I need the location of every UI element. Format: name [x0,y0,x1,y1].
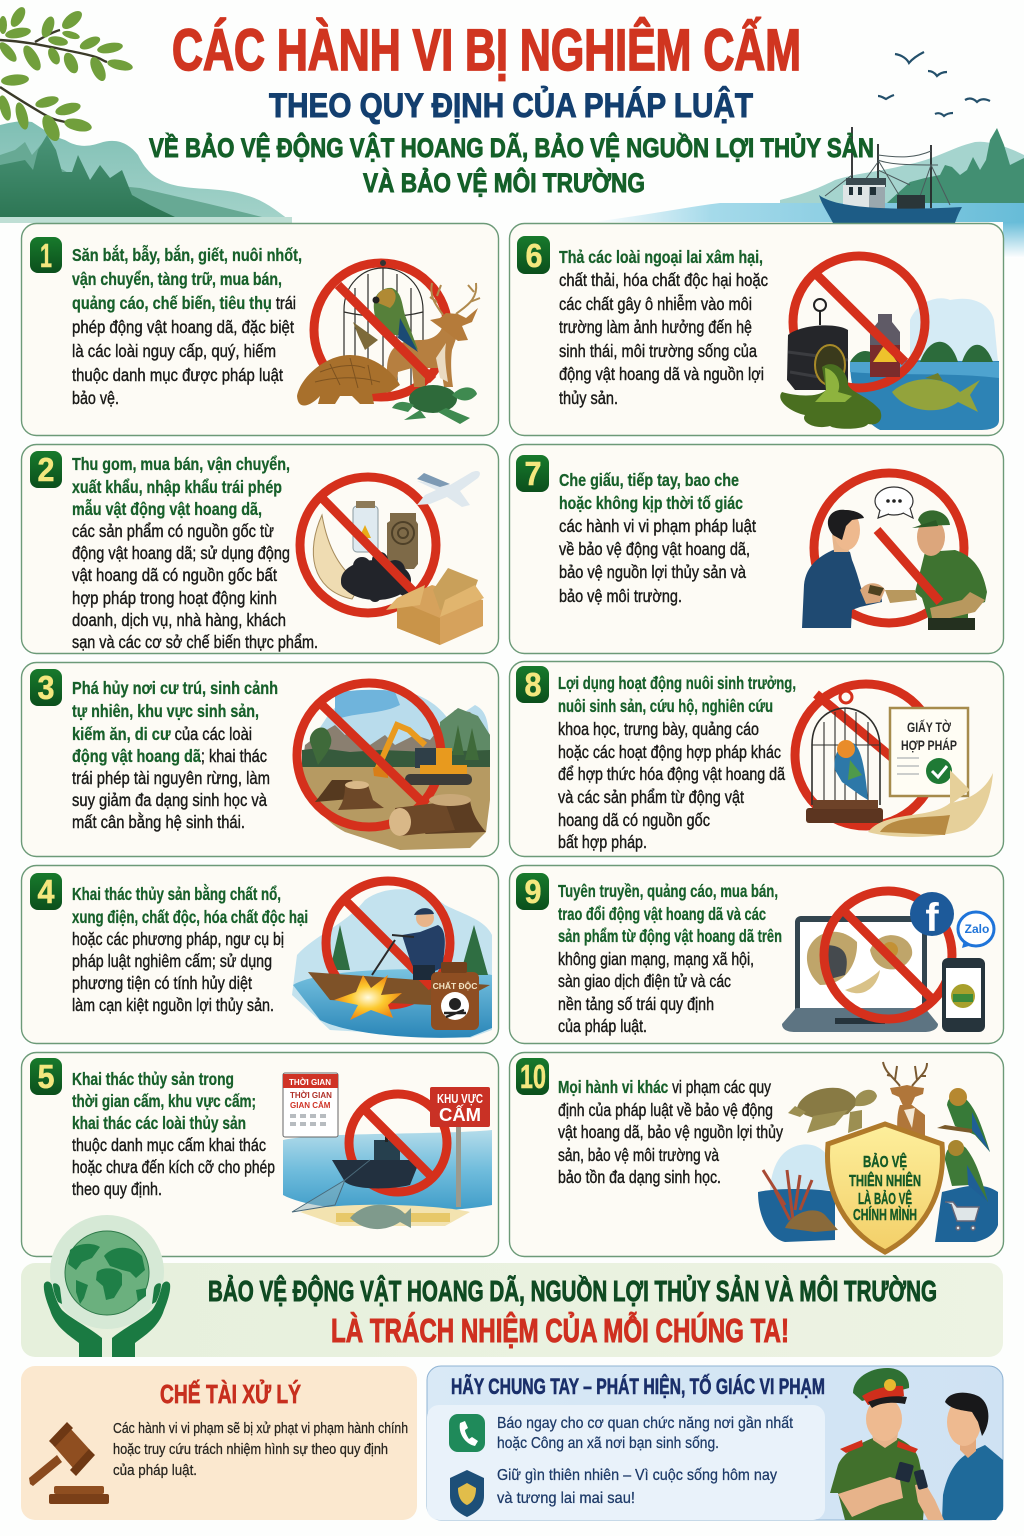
text 3: tự nhiên, khu vực sinh sản, [72,701,259,721]
badge 10: 10 [520,1058,546,1095]
text 8: hoặc các hoạt động hợp pháp khác [558,742,781,762]
text 4: xung điện, chất độc, hóa chất độc hại [72,907,308,927]
text 10: sản, bảo vệ môi trường và [558,1145,719,1165]
badge 1: 1 [40,237,52,274]
text 5: hoặc chưa đến kích cỡ cho phép [72,1157,275,1177]
panel: item 9 [510,866,1004,1044]
text 8: nuôi sinh sản, cứu hộ, nghiên cứu [558,696,773,716]
text 4: pháp luật nghiêm cấm; sử dụng [72,951,272,971]
text 6: sinh thái, môi trường sống của [559,341,757,361]
icon: facebook [910,892,954,940]
text 9: Tuyên truyền, quảng cáo, mua bán, [558,881,778,901]
text 3: Phá hủy nơi cư trú, sinh cảnh [72,678,278,698]
icon: shield: LÀ BẢO VỆ [858,1189,912,1208]
text 1: thuộc danh mục được pháp luật [72,365,283,385]
badge 3: 3 [38,669,54,706]
text 5: thuộc danh mục cấm khai thác [72,1135,266,1155]
badge 2: 2 [38,451,54,488]
text 9: nền tảng số trái quy định [558,994,714,1014]
badge 8: 8 [524,666,542,703]
text 8: và các sản phẩm từ động vật [558,787,744,807]
text: report line: Báo ngay cho cơ quan chức năng nơi gần nhất [497,1415,793,1432]
text 7: bảo vệ nguồn lợi thủy sản và [559,562,746,582]
text: keep nature line [497,1467,777,1507]
text 8: bất hợp pháp. [558,832,647,852]
text 6: thủy sản. [559,388,618,408]
text 4 [72,883,308,1015]
text 1: phép động vật hoang dã, đặc biệt [72,317,294,337]
text 7: các hành vi vi phạm pháp luật [559,516,756,536]
panel: report violations [427,1366,1003,1520]
icon: fishing boat [819,127,962,223]
icon: gavel [29,1422,109,1504]
header scenery: right hills and water [590,128,1024,258]
icon: shield [828,1124,942,1252]
text 3: kiếm ăn, di cư của các loài [72,724,252,744]
text 9 [558,881,782,1036]
text 6: các chất gây ô nhiễm vào môi [559,293,752,314]
text 1: bảo vệ. [72,388,119,408]
text 7 [559,470,756,606]
illustration: caged bird, legal paper, tusk [795,684,993,837]
text 1: Săn bắt, bẫy, bắn, giết, nuôi nhốt, [72,244,302,265]
text: penalties: hoặc truy cứu trách nhiệm hình sự theo quy định [113,1441,388,1458]
text 8 [558,673,796,852]
banner: call to action [21,1215,1003,1357]
panel: item 4 [22,866,498,1044]
panel: item 7 [510,444,1004,654]
text 6: trường làm ảnh hưởng đến hệ [559,317,752,337]
text: report line [497,1415,793,1452]
icon: police shield [450,1470,484,1517]
text 3: động vật hoang dã; khai thác [72,746,267,766]
illustration: explosive fishing scene [292,881,492,1038]
badge 9 [516,873,549,910]
text: penalties: Các hành vi vi phạm sẽ bị xử phạt vi phạm hành chính [113,1420,408,1437]
icon: shield: CHÍNH MÌNH [853,1205,917,1224]
text 2: Thu gom, mua bán, vận chuyển, [72,454,290,474]
turtle [409,385,457,413]
illustration: caged parrot, deer, pangolin, turtle [297,260,480,424]
text 5: theo quy định. [72,1179,162,1199]
subtitle: theo quy dinh: THEO QUY ĐỊNH CỦA PHÁP LUẬT [269,87,753,125]
badge 3 [30,669,62,706]
icon: zalo: Zalo [965,922,989,936]
illustration: police officer [830,1368,925,1520]
badge 4: 4 [38,873,55,910]
deer [387,325,458,387]
badge 5: 5 [38,1058,54,1095]
illustration: second phone and hand [914,1469,944,1520]
panel: item 8 [510,662,1004,856]
text 10: vật hoang dã, bảo vệ nguồn lợi thủy [558,1122,783,1142]
panel: item 6 [510,224,1004,436]
icon: legal document: GIẤY TỜ [907,718,951,735]
badge 7 [516,455,549,492]
text 1: quảng cáo, chế biến, tiêu thụ trái [72,293,296,313]
illustration: tusk, jar, charcoal pile, plane, box [300,471,484,645]
icon: zalo [958,912,994,948]
icon: hands holding globe [44,1215,170,1357]
badge 6: 6 [526,237,542,274]
text 4: Khai thác thủy sản bằng chất nổ, [72,883,281,904]
parrot [374,288,418,350]
icon: facebook: f [925,896,939,940]
text 2: hợp pháp trong hoạt động kinh [72,588,277,608]
text 6: chất thải, hóa chất độc hại hoặc [559,270,768,290]
man right [915,550,987,618]
heading: report: HÃY CHUNG TAY – PHÁT HIỆN, TỐ GIÁC VI PHẠM [451,1373,825,1399]
man left [802,548,882,628]
illustration: banned fishing area scene: THỜI GIAN [290,1091,332,1100]
text 5: khai thác các loài thủy sản [72,1113,246,1133]
illustration: banned fishing area scene: GIAN CẤM [290,1100,331,1110]
icon: phone [449,1414,485,1452]
text 10: bảo tồn đa dạng sinh học. [558,1167,721,1187]
text 5 [72,1069,275,1199]
illustration: explosive fishing scene: CHẤT ĐỘC [433,980,477,991]
text 8: Lợi dụng hoạt động nuôi sinh trưởng, [558,673,796,693]
icon: legal document: HỢP PHÁP [901,737,957,753]
badge 9: 9 [524,873,542,910]
illustration: laptop selling wildlife, social apps, phone [782,891,994,1032]
panel: item 3 [22,662,498,856]
illustration: banned fishing area scene: THỜI GIAN [289,1078,331,1087]
text 7: hoặc không kịp thời tố giác [559,493,743,513]
text 9: trao đổi động vật hoang dã và các [558,904,766,924]
text 2: mẫu vật động vật hoang dã, [72,498,262,519]
text 4: phương tiện có tính hủy diệt [72,973,252,993]
text 1: vận chuyển, tàng trữ, mua bán, [72,269,282,289]
text 2: các sản phẩm có nguồn gốc từ [72,521,274,541]
panel: penalties [21,1366,417,1520]
badge 4 [30,873,62,910]
text 9: của pháp luật. [558,1016,647,1036]
text 2 [72,454,318,652]
text 4: làm cạn kiệt nguồn lợi thủy sản. [72,995,274,1015]
badge 2 [30,451,62,488]
illustration: banned fishing area scene: KHU VỰC [437,1091,483,1106]
panel: item 1 [22,224,498,436]
illustration: polluted water, barrel, fish [780,256,999,430]
text 9: không gian mạng, mạng xã hội, [558,949,754,969]
text 3: mất cân bằng hệ sinh thái. [72,811,245,832]
text 6 [559,247,768,408]
illustration: citizen [942,1393,1003,1520]
text 10 [558,1077,783,1187]
text 3 [72,678,278,832]
text 8: hoang dã có nguồn gốc [558,810,710,830]
text 3: suy giảm đa dạng sinh học và [72,790,267,810]
panel: item 2 [22,444,498,654]
illustration: two men exchanging behind the law [802,473,987,630]
text 1 [72,244,302,408]
badge 6 [517,236,550,274]
text 6: động vật hoang dã và nguồn lợi [559,364,764,384]
text 1: là các loài nguy cấp, quý, hiếm [72,341,276,361]
pangolin [297,355,400,406]
panel: item 10 [510,1052,1004,1256]
icon: speech bubble [875,487,913,518]
text 4: hoặc các phương pháp, ngư cụ bị [72,929,284,949]
illustration: animals behind protection shield [758,1062,998,1252]
title: CÁC HÀNH VI BỊ NGHIÊM CẤM [172,18,801,83]
text: keep nature line: và tương lai mai sau! [497,1490,635,1507]
text: report line: hoặc Công an xã nơi bạn sinh sống. [497,1435,719,1452]
text 7: bảo vệ môi trường. [559,586,682,606]
text 5: Khai thác thủy sản trong [72,1069,234,1089]
text 10: Mọi hành vi khác vi phạm các quy [558,1077,771,1097]
text 10: định của pháp luật về bảo vệ động [558,1100,773,1120]
text 2: doanh, dịch vụ, nhà hàng, khách [72,610,286,630]
badge 5 [30,1058,62,1095]
text 9: sản phẩm từ động vật hoang dã trên [558,926,782,946]
text 8: để hợp thức hóa động vật hoang dã [558,764,785,784]
illustration: banned fishing area scene [283,1073,492,1229]
text 2: động vật hoang dã; sử dụng động [72,543,290,563]
text 2: xuất khẩu, nhập khẩu trái phép [72,477,282,497]
text 8: khoa học, trưng bày, quảng cáo [558,719,759,739]
badge 1 [30,237,62,274]
text: penalties: của pháp luật. [113,1462,197,1479]
badge 7: 7 [524,455,542,492]
text: keep nature line: Giữ gìn thiên nhiên – Vì cuộc sống hôm nay [497,1467,777,1484]
icon: shield: BẢO VỆ [863,1152,907,1171]
text: penalties [113,1420,408,1479]
banner heading line 2: LÀ TRÁCH NHIỆM CỦA MỖI CHÚNG TA! [331,1312,789,1349]
badge 8 [516,666,549,703]
icon: legal document [890,708,968,796]
text 9: sàn giao dịch điện tử và các [558,971,731,991]
text 3: trái phép tài nguyên rừng, làm [72,768,270,788]
icon: birds [878,52,990,116]
subtitle: scope line 1: VỀ BẢO VỆ ĐỘNG VẬT HOANG DÃ, BẢO VỆ NGUỒN LỢI THỦY SẢN [149,131,874,163]
text 5: thời gian cấm, khu vực cấm; [72,1091,256,1111]
header scenery: left forest hills [0,121,292,223]
icon: shield: THIÊN NHIÊN [849,1171,921,1190]
text 2: sạn và các cơ sở chế biến thực phẩm. [72,632,318,652]
heading: penalties: CHẾ TÀI XỬ LÝ [160,1378,301,1409]
text 6: Thả các loài ngoại lai xâm hại, [559,247,763,267]
text 7: Che giấu, tiếp tay, bao che [559,470,739,490]
text 7: về bảo vệ động vật hoang dã, [559,539,750,559]
illustration: banned fishing area scene: CẤM [439,1104,481,1125]
subtitle: scope line 2: VÀ BẢO VỆ MÔI TRƯỜNG [363,166,645,198]
panel: item 5 [22,1052,498,1256]
illustration: deforestation with excavator [297,683,490,850]
text 2: vật hoang dã có nguồn gốc bất [72,565,277,585]
icon: tree branches with leaves [0,5,134,144]
